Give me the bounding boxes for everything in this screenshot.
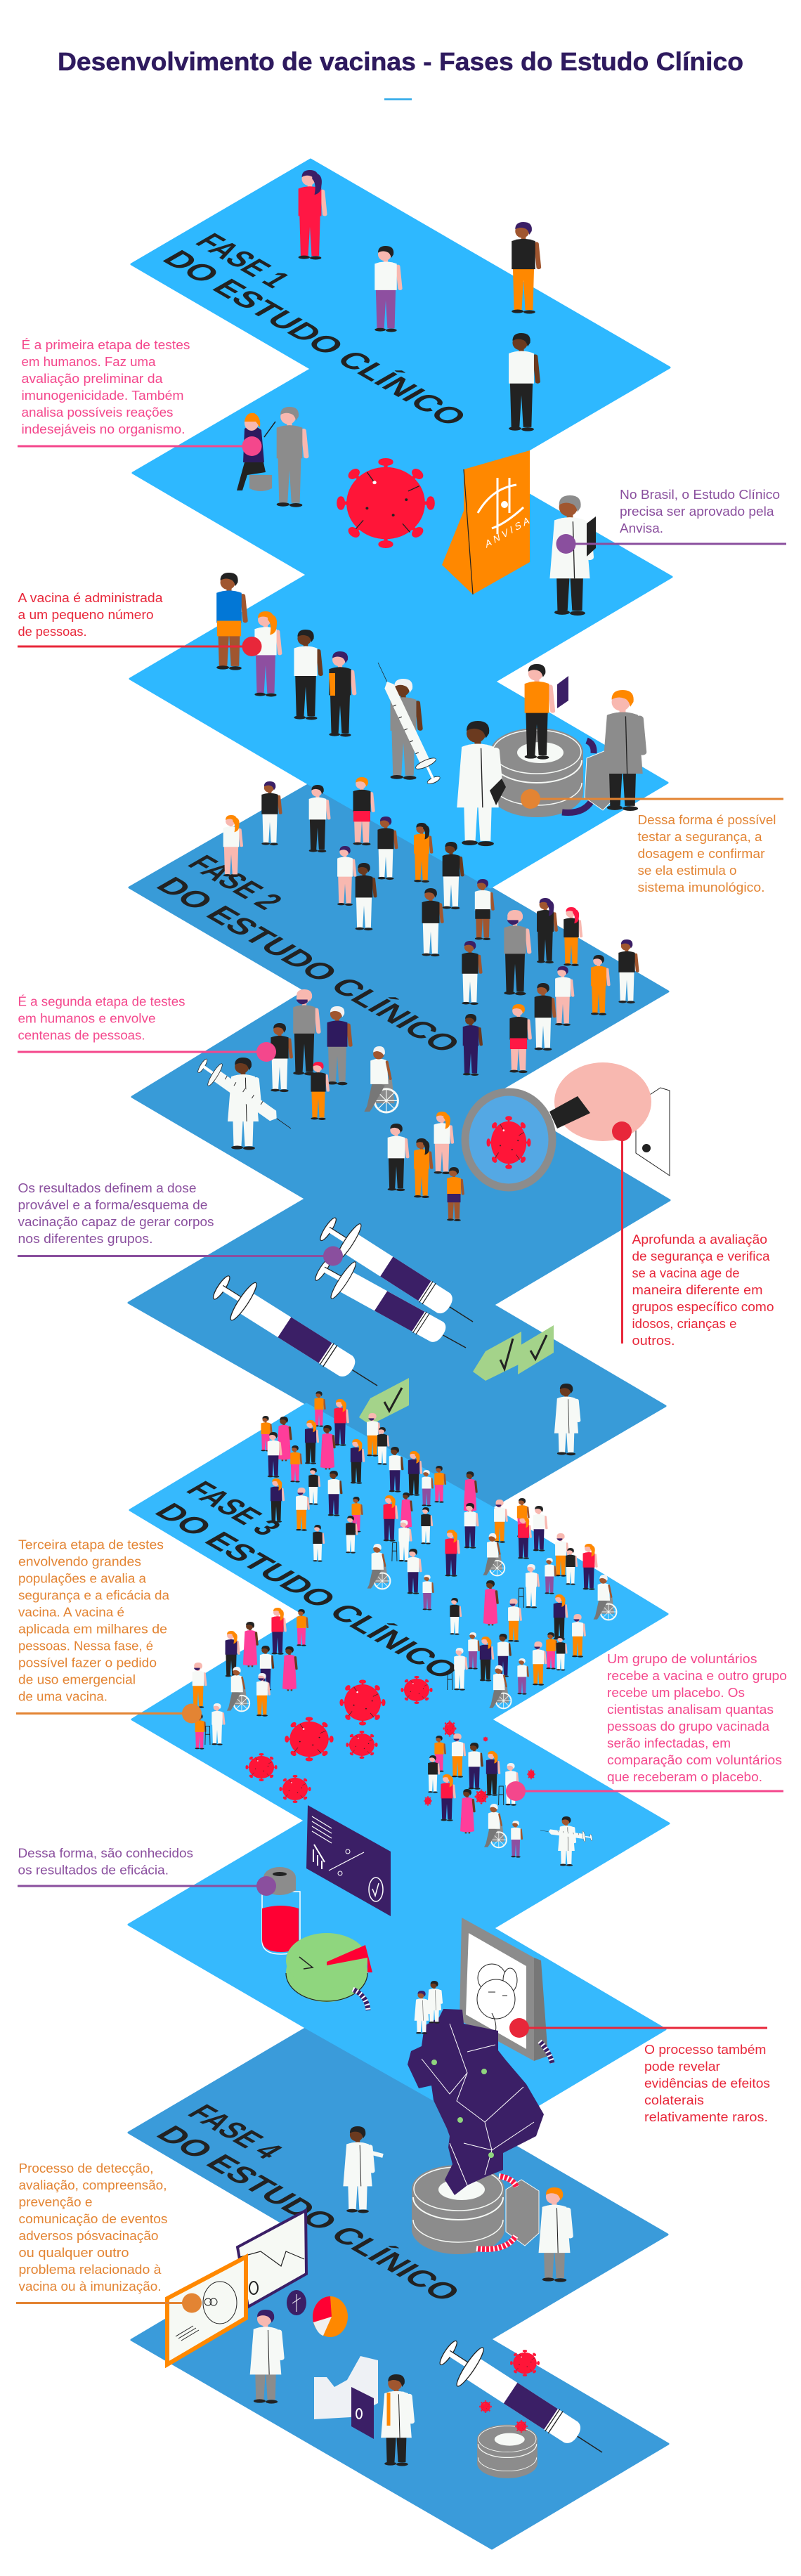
virus [339,460,433,547]
callout: rare side effects [509,2018,770,2124]
callout: anvisa [556,487,786,554]
callout: specific groups: maneira diferente em [632,1282,763,1297]
doctor observing [554,1384,578,1455]
callout: small group: a um pequeno número [18,607,153,622]
callout: anvisa: precisa ser aprovado pela [620,504,774,519]
phase 3 crowd [193,1391,616,1750]
callout: third step: Terceira etapa de testes [18,1537,164,1552]
heading: fase 1: DO ESTUDO CLÍNICO [155,245,476,431]
callout: specific groups: se a vacina age de [632,1266,739,1280]
monitors [167,2211,306,2364]
callout: placebo [506,1651,787,1801]
callout: placebo: cientistas analisam quantas [607,1702,774,1717]
heading: fase 4: FASE 4 [180,2100,291,2164]
callout: first step: em humanos. Faz uma [21,354,156,369]
panel: phase 2 floor [129,784,670,1507]
callout: rare side effects: relativamente raros. [644,2109,768,2124]
phase 3 viruses [246,1677,432,1802]
callout: safety and dose: sistema imunológico. [638,880,764,895]
callout: safety and dose [521,789,783,895]
callout: placebo: Um grupo de voluntários [607,1651,757,1666]
callout: rare side effects: evidências de efeitos [644,2076,770,2090]
callout: rare side effects: colaterais [644,2093,704,2107]
panel: phase 3 floor [129,1404,669,2133]
doctors on the map [415,1981,441,2034]
callout: pharmacovigilance: prevenção e [18,2194,93,2209]
phase 1 queue [216,573,354,736]
callout: third step: populações e avalia a [18,1571,147,1585]
callout: third step: segurança e a eficácia da [18,1588,170,1602]
panel: phase 1 floor [130,160,672,887]
callout: placebo: serão infectadas, em [607,1736,731,1750]
callout: pharmacovigilance: Processo de detecção, [18,2161,153,2175]
callout: third step: possível fazer o pedido [18,1655,157,1670]
callout: anvisa: No Brasil, o Estudo Clínico [620,487,780,502]
heading: fase 1: FASE 1 [188,228,299,292]
callout: rare side effects: O processo também [644,2042,766,2057]
callout: rare side effects: pode revelar [644,2059,720,2074]
callout: specific groups: grupos específico como [632,1299,774,1314]
callout: small group: de pessoas. [18,624,87,639]
machine with brazil map and doctor [412,2165,570,2282]
callout: placebo: pessoas do grupo vacinada [607,1719,770,1733]
callout: pharmacovigilance: vacina ou à imunização. [18,2279,162,2294]
callout: placebo: recebe a vacina e outro grupo [607,1668,787,1683]
callout: safety and dose: Dessa forma é possível [638,812,776,827]
phase 1 volunteers [299,170,539,431]
callout: second step: É a segunda etapa de testes [18,994,185,1009]
callout: pharmacovigilance: adversos pósvacinação [18,2228,159,2243]
callout: specific groups [612,1121,774,1348]
callout: first step [18,337,261,456]
callout: dose results: vacinação capaz de gerar corpos [18,1214,214,1229]
doctor pointing [343,2126,383,2213]
callout: dose results [18,1180,343,1266]
callout: safety and dose: se ela estimula o [638,863,736,878]
callout: first step: avaliação preliminar da [21,371,163,386]
callout: dose results: Os resultados definem a dose [18,1180,197,1195]
group near magnifier [388,1112,463,1221]
callout: second step: em humanos e envolve [18,1010,156,1026]
callout: second step [18,994,276,1062]
scientist with syringe [194,1054,298,1150]
callout: second step: centenas de pessoas. [18,1027,145,1043]
callout: first step: indesejáveis no organismo. [21,422,185,436]
anvisa board [442,450,533,594]
screen with portrait [460,1918,552,2063]
vial [262,1867,300,1954]
callout: small group [18,590,261,656]
callout: third step: vacina. A vacina é [18,1605,124,1619]
machine scene [457,664,643,846]
callout: specific groups: idosos, crianças e [632,1316,736,1331]
callout: pharmacovigilance: comunicação de eventos [18,2211,167,2226]
doctor with clipboard [549,495,596,616]
heading: fase 2: DO ESTUDO CLÍNICO [148,872,469,1058]
callout: specific groups: Aprofunda a avaliação [632,1232,767,1247]
pie charts [287,2290,348,2337]
panel: phase 4 floor [129,2028,668,2549]
callout: pharmacovigilance: ou qualquer outro [18,2245,129,2260]
callout: third step: envolvendo grandes [18,1554,141,1568]
green dial device [286,1933,372,2010]
callout: pharmacovigilance [16,2161,202,2313]
callout: placebo: comparação com voluntários [607,1752,782,1767]
callout: first step: imunogenicidade. Também [21,388,184,403]
callout: placebo: recebe um placebo. Os [607,1685,745,1700]
callout: pharmacovigilance: problema relacionado à [18,2262,162,2277]
callout: safety and dose: dosagem e confirmar [638,846,764,861]
callout: efficacy: Dessa forma, são conhecidos [18,1845,193,1861]
phase 2 crowd [223,777,637,1120]
results panel [306,1805,391,1916]
callout: pharmacovigilance: avaliação, compreensão, [18,2178,167,2192]
callout: anvisa: Anvisa. [620,521,663,535]
magnifier with virus and hand [465,1062,670,1188]
paper and report [314,2356,412,2466]
heading: fase 3: DO ESTUDO CLÍNICO [147,1498,468,1684]
callout: efficacy: os resultados de eficácia. [18,1862,169,1878]
infected group [424,1721,593,1866]
callout: first step: analisa possíveis reações [21,405,174,419]
callout: third step [16,1537,202,1723]
callout: third step: aplicada em milhares de [18,1622,167,1636]
scientist looking at monitors [250,2310,281,2404]
callout: third step: de uso emergencial [18,1672,136,1686]
callout: safety and dose: testar a segurança, a [638,829,762,844]
callout: efficacy [18,1845,276,1896]
title: Desenvolvimento de vacinas - Fases do Estudo Clínico [58,47,743,76]
heading: fase 2: FASE 2 [180,850,291,914]
callout: specific groups: de segurança e verifica [632,1249,770,1263]
callout: dose results: provável e a forma/esquema de [18,1197,208,1212]
syringe with viruses [433,2331,615,2478]
heading: fase 3: FASE 3 [178,1476,289,1540]
anvisa board: ANVISA [484,512,533,550]
callout: third step: pessoas. Nessa fase, é [18,1639,153,1653]
syringes [206,1209,485,1405]
seated patient and vaccinator [237,407,306,507]
map of brazil [408,2009,544,2195]
nurse with syringe [368,658,445,787]
callout: placebo: que receberam o placebo. [607,1769,762,1784]
callout: dose results: nos diferentes grupos. [18,1231,153,1246]
callout: third step: de uma vacina. [18,1689,108,1703]
callout: first step: É a primeira etapa de testes [21,337,190,352]
approval check boxes [359,1325,554,1425]
callout: specific groups: outros. [632,1333,675,1348]
callout: small group: A vacina é administrada [18,590,163,605]
heading: fase 4: DO ESTUDO CLÍNICO [148,2121,469,2306]
